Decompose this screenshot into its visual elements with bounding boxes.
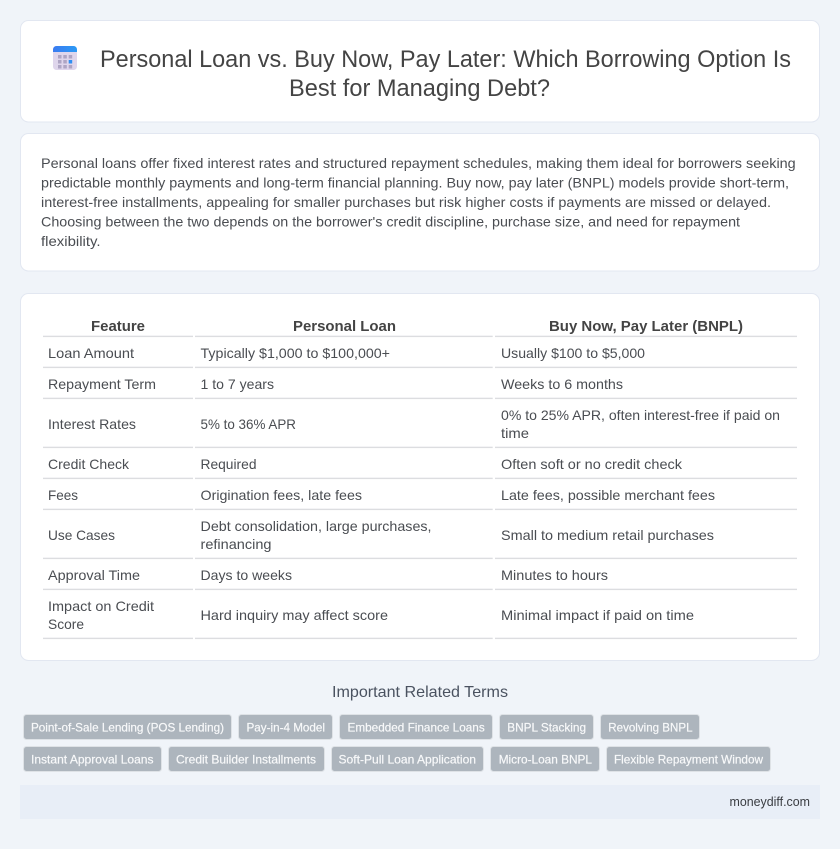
related term tags: Soft-Pull Loan Application bbox=[338, 752, 476, 766]
panel: summary paragraph: predictable monthly payments and long-term financial planning. Buy now, pay later (BNPL) models provide short-term, bbox=[41, 174, 789, 190]
row: loan amount: Usually $100 to $5,000 bbox=[501, 345, 645, 361]
related term tags: Micro-Loan BNPL bbox=[499, 752, 592, 766]
title: Personal Loan vs. Buy Now, Pay Later: Which Borrowing Option Is bbox=[100, 46, 791, 73]
row: approval time: Minutes to hours bbox=[501, 567, 608, 583]
row: impact on credit score: Impact on Credit bbox=[48, 598, 154, 614]
row: credit check: Required bbox=[200, 456, 256, 472]
row: fees bbox=[48, 487, 715, 503]
row: repayment term: Weeks to 6 months bbox=[501, 376, 623, 392]
panel: summary paragraph: Personal loans offer fixed interest rates and structured repayment schedules, making them ideal for borrowers seeking bbox=[41, 155, 796, 171]
related term tags: BNPL Stacking bbox=[507, 720, 586, 734]
related term tags: Flexible Repayment Window bbox=[614, 752, 763, 766]
footer bar bbox=[20, 785, 820, 819]
related term tags: Embedded Finance Loans bbox=[348, 720, 485, 734]
panel: summary paragraph bbox=[20, 134, 820, 271]
row: interest rates: Interest Rates bbox=[48, 416, 136, 432]
related term tags: Credit Builder Installments bbox=[176, 752, 316, 766]
row: approval time: Days to weeks bbox=[200, 567, 292, 583]
row: fees: Late fees, possible merchant fees bbox=[501, 487, 715, 503]
related term tags: Pay-in-4 Model bbox=[246, 720, 325, 734]
row: use cases: Small to medium retail purchases bbox=[501, 527, 714, 543]
row: repayment term bbox=[48, 376, 623, 392]
row: loan amount bbox=[48, 345, 645, 361]
row: interest rates: 0% to 25% APR, often interest-free if paid on bbox=[501, 407, 780, 423]
row: impact on credit score: Minimal impact if paid on time bbox=[501, 607, 694, 623]
row: interest rates: 5% to 36% APR bbox=[200, 416, 296, 432]
table header row: Buy Now, Pay Later (BNPL) bbox=[549, 319, 743, 335]
row: approval time bbox=[48, 567, 608, 583]
heading: important related terms: Important Related Terms bbox=[332, 684, 508, 701]
row: repayment term: 1 to 7 years bbox=[200, 376, 274, 392]
row: impact on credit score: Hard inquiry may affect score bbox=[200, 607, 388, 623]
footer bar: moneydiff.com bbox=[730, 795, 810, 809]
row: fees: Fees bbox=[48, 487, 78, 503]
table header row bbox=[91, 319, 743, 335]
row: impact on credit score: Score bbox=[48, 616, 84, 632]
row: repayment term: Repayment Term bbox=[48, 376, 156, 392]
table header row: Personal Loan bbox=[293, 319, 396, 335]
panel: comparison table bbox=[20, 294, 820, 660]
row: interest rates: time bbox=[501, 425, 529, 441]
title bbox=[100, 46, 791, 102]
related term tags bbox=[24, 714, 770, 772]
related term tags: Revolving BNPL bbox=[608, 720, 693, 734]
row: use cases: Use Cases bbox=[48, 527, 115, 543]
row: use cases: refinancing bbox=[200, 536, 272, 552]
table header row: Feature bbox=[91, 319, 145, 335]
title: Best for Managing Debt? bbox=[289, 75, 550, 102]
row: impact on credit score bbox=[48, 598, 694, 632]
panel: summary paragraph: interest-free installments, appealing for smaller purchases but risk higher costs if payments are missed or delayed. bbox=[41, 194, 771, 210]
row: use cases: Debt consolidation, large purchases, bbox=[200, 518, 432, 534]
row: loan amount: Loan Amount bbox=[48, 345, 134, 361]
row: credit check: Often soft or no credit check bbox=[501, 456, 683, 472]
row: loan amount: Typically $1,000 to $100,000+ bbox=[200, 345, 390, 361]
row: approval time: Approval Time bbox=[48, 567, 140, 583]
related term tags: Point-of-Sale Lending (POS Lending) bbox=[31, 720, 224, 734]
panel: summary paragraph: Choosing between the two depends on the borrower's credit discipline, purchase size, and need for repayment bbox=[41, 214, 740, 230]
related term tags: Instant Approval Loans bbox=[31, 752, 154, 766]
row: credit check bbox=[48, 456, 683, 472]
row: use cases bbox=[48, 518, 714, 552]
row: fees: Origination fees, late fees bbox=[200, 487, 362, 503]
row: credit check: Credit Check bbox=[48, 456, 130, 472]
icon: calendar bbox=[53, 46, 77, 70]
row: interest rates bbox=[48, 407, 780, 441]
panel: header bbox=[20, 20, 820, 122]
panel: summary paragraph: flexibility. bbox=[41, 233, 100, 249]
